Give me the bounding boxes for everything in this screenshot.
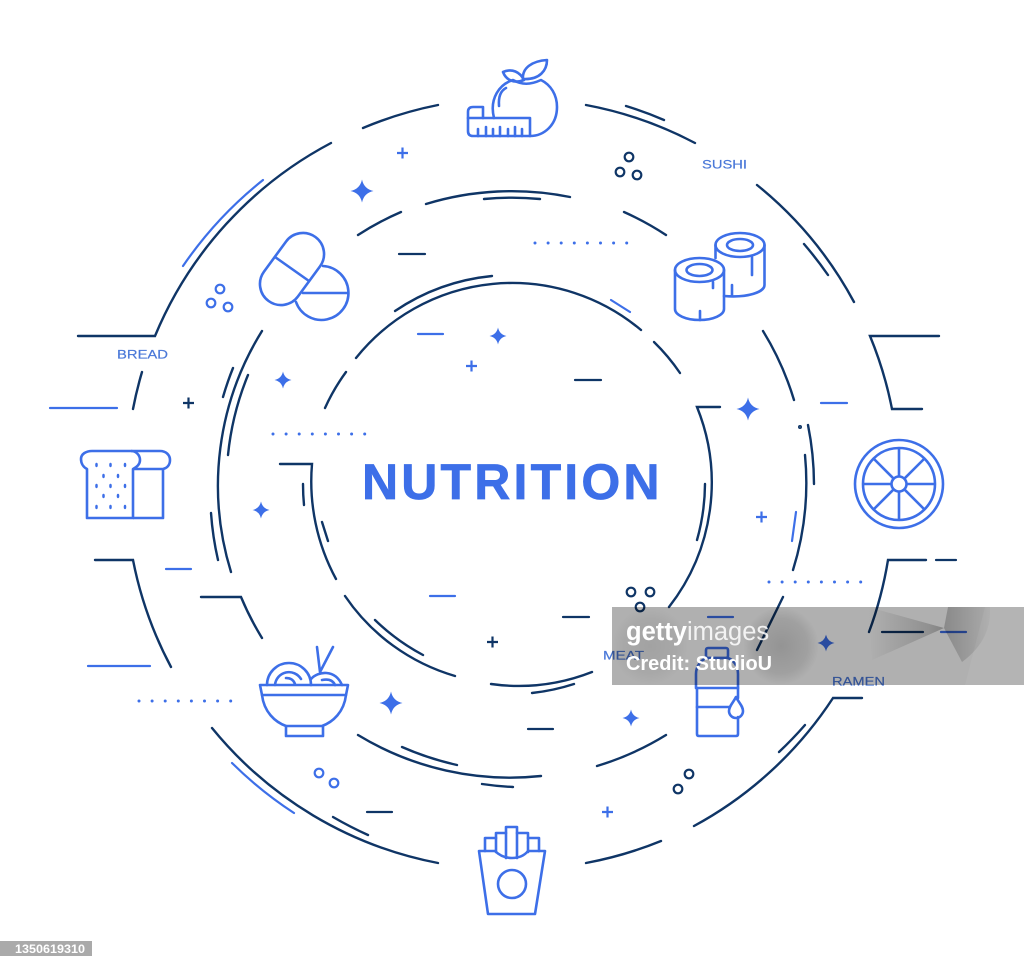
icon: french fries [479, 827, 545, 914]
icon: orange slice [855, 440, 943, 528]
middle ring arcs [201, 191, 814, 787]
inner ring arcs [280, 276, 720, 693]
label: ramen: RAMEN [832, 674, 885, 688]
icon: bread loaf [81, 451, 170, 518]
label: meat: MEAT [603, 648, 645, 662]
watermark band [612, 607, 1024, 685]
outer ring blue accents [183, 180, 294, 813]
watermark logo text: gettyimages [626, 618, 769, 646]
title: NUTRITION [362, 454, 661, 510]
inner ring blue accent [611, 300, 630, 312]
label: bread: BREAD [117, 348, 168, 362]
sparkles [252, 180, 834, 726]
short dark dashes [367, 254, 956, 812]
icon: water bottle [696, 648, 743, 736]
icon: pills [260, 233, 348, 320]
small blue plus marks [397, 148, 767, 818]
dotted lines [139, 243, 863, 701]
outer ring arcs [78, 105, 939, 863]
middle ring blue accent [792, 512, 796, 541]
image id number: 1350619310 [15, 942, 85, 956]
label: sushi: SUSHI [702, 158, 747, 172]
watermark credit text: Credit: StudioU [626, 653, 772, 675]
dark dot clusters [616, 153, 693, 793]
image id tag [0, 941, 92, 956]
icon: sushi rolls [675, 233, 764, 320]
icon: apple with measuring tape [468, 60, 557, 136]
icon: noodle bowl [260, 647, 348, 736]
small dark plus marks [183, 398, 498, 648]
short blue dashes [50, 334, 966, 666]
blue dot clusters [207, 285, 338, 787]
